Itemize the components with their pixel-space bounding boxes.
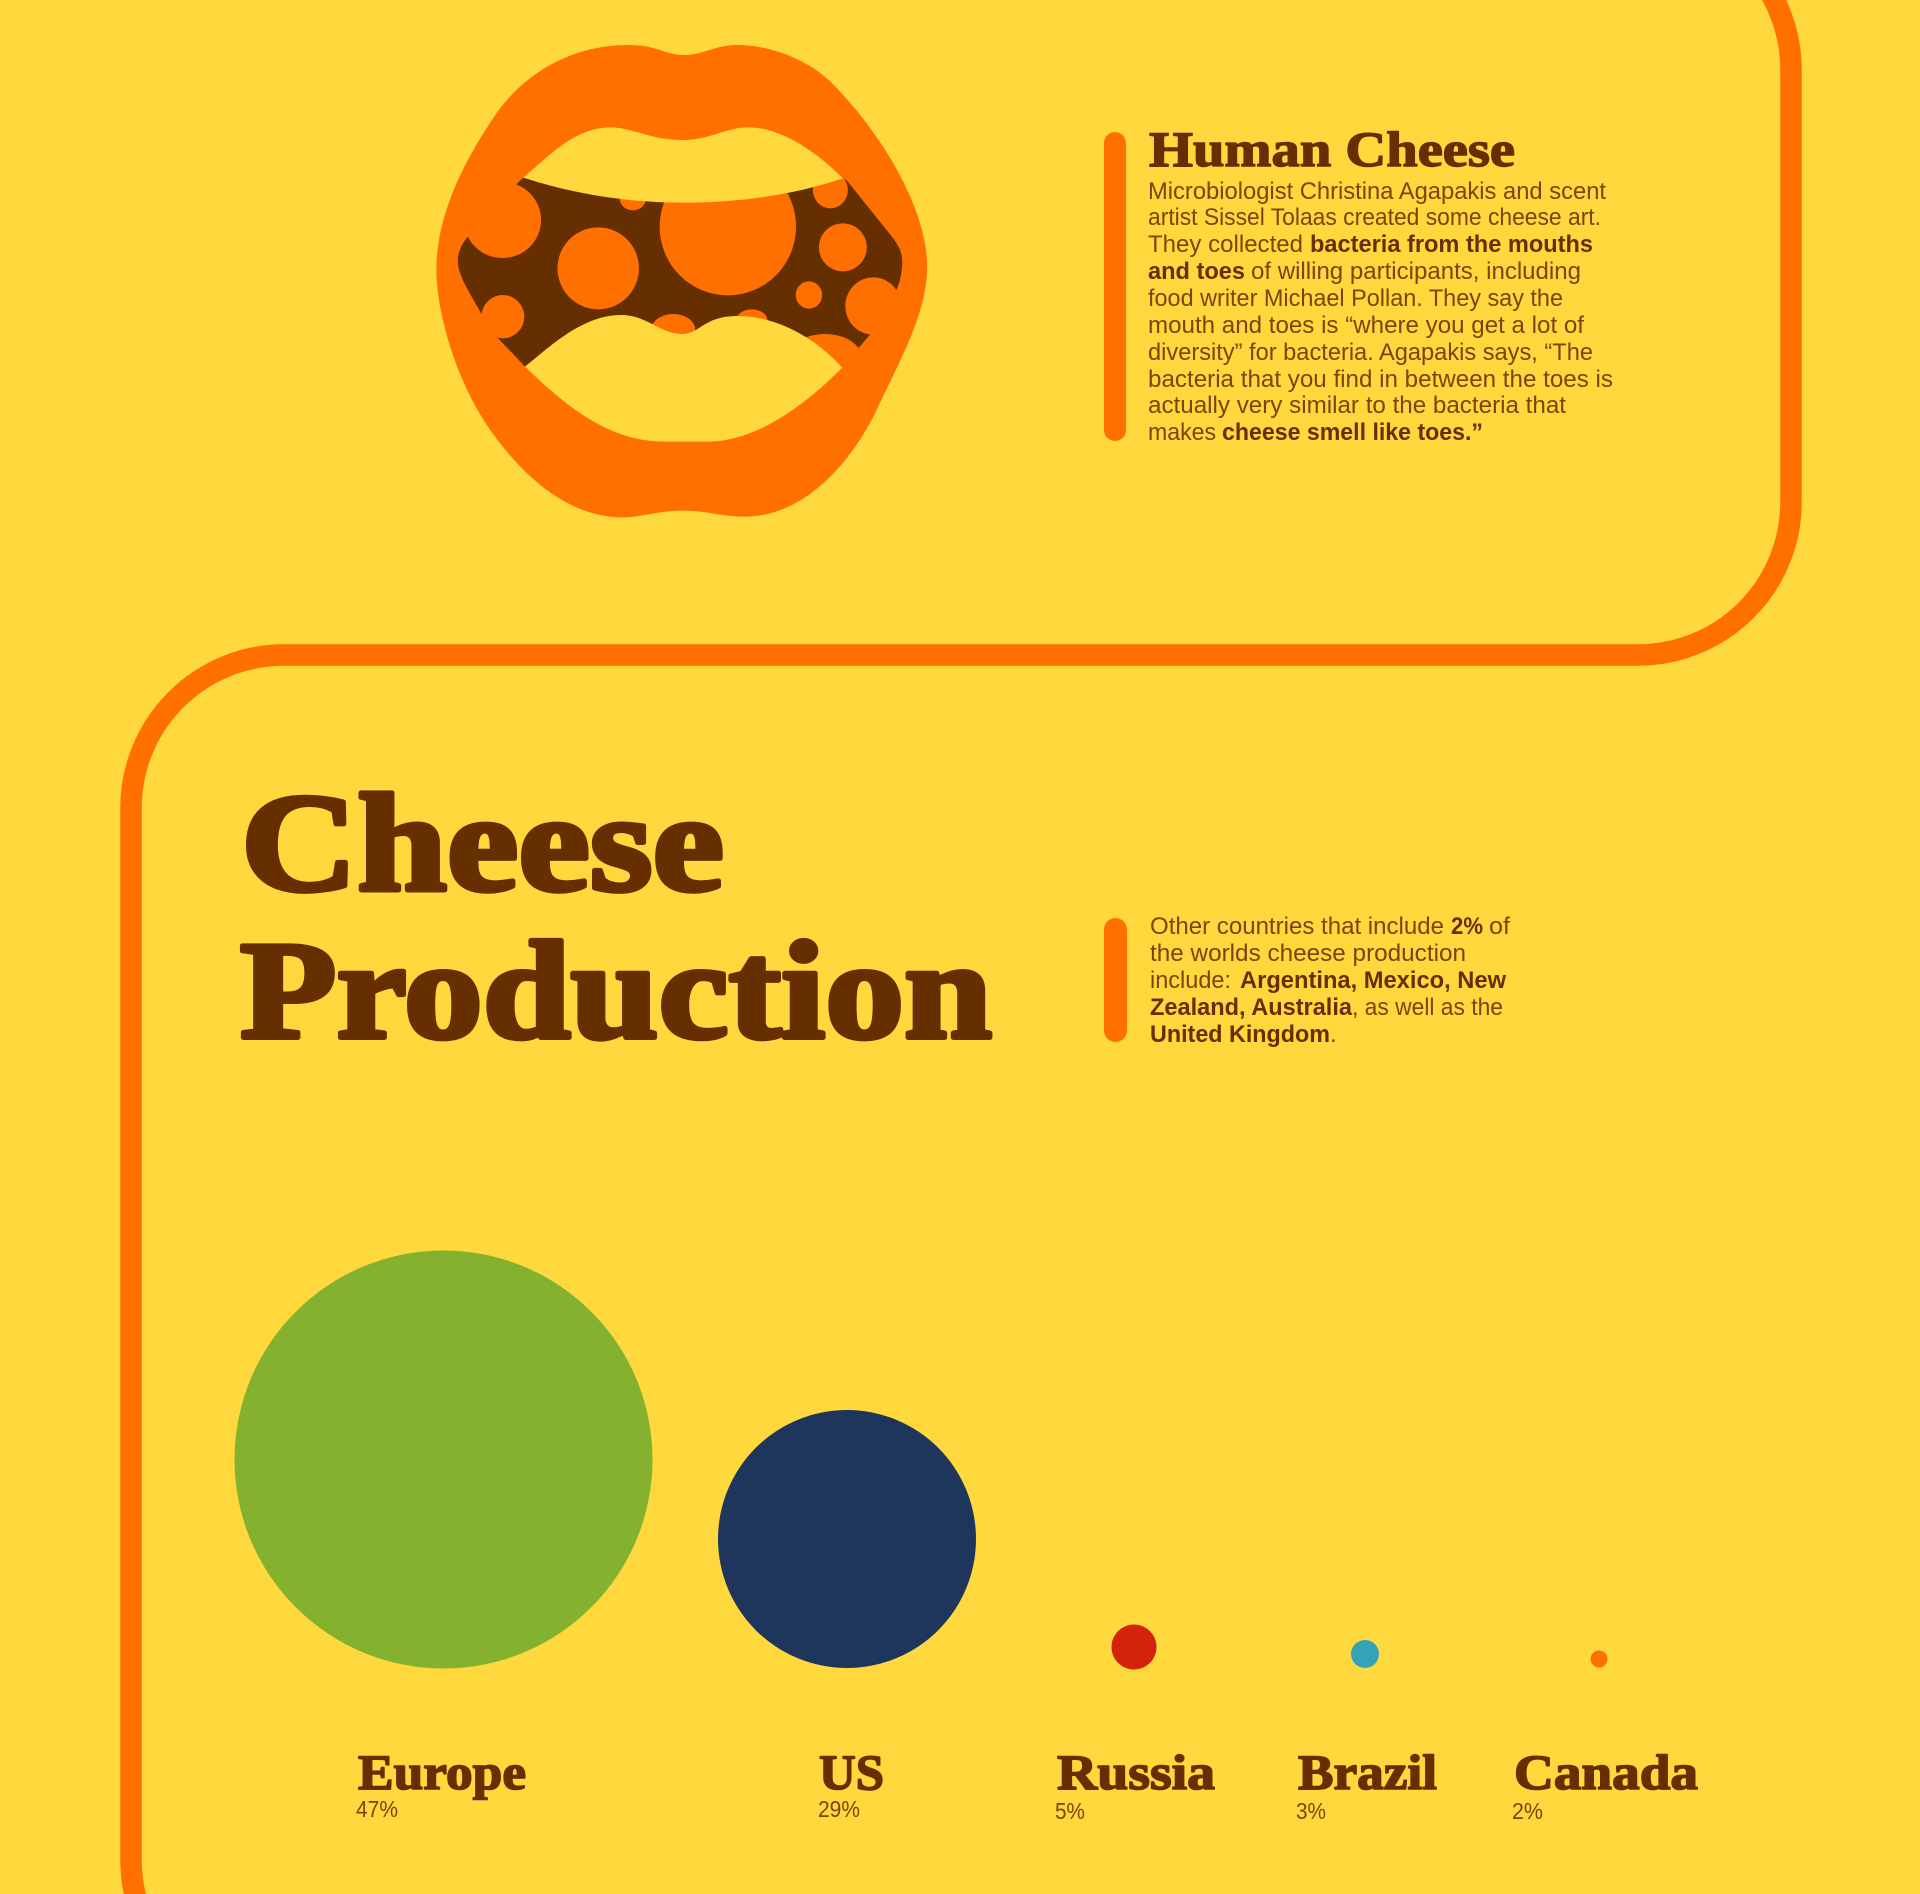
text block: human cheese description: mouth and toes is “where you get a lot of [1148,312,1584,339]
text block: other countries note: the worlds cheese production [1150,940,1466,967]
outer lips [436,45,927,517]
text block: other countries note: United Kingdom [1150,1021,1330,1048]
bubble: US [718,1410,976,1668]
label: Brazil 3%: Brazil [1298,1744,1437,1800]
text block: human cheese description: They collected [1148,231,1303,258]
label: Russia 5%: 5% [1055,1798,1085,1824]
label: Canada 2%: Canada [1514,1744,1698,1800]
text block: other countries note: include: [1150,967,1231,994]
title: Cheese Production: Cheese [241,766,724,921]
label: Europe 47%: 47% [356,1796,398,1822]
bubble: Russia [1112,1624,1156,1670]
heading: Human Cheese: Human Cheese [1149,121,1515,177]
cheese interior [458,178,902,387]
text block: human cheese description [1148,178,1613,446]
text block: other countries note: Other countries that include [1150,913,1444,940]
text block: human cheese description: actually very similar to the bacteria that [1148,392,1566,419]
bubble: Brazil [1351,1640,1379,1668]
accent bar: human cheese [1104,132,1126,441]
text block: human cheese description: food writer Michael Pollan. They say the [1148,285,1563,312]
text block: human cheese description: bacteria that you find in between the toes is [1148,366,1613,393]
text block: other countries note: Argentina, Mexico, New [1240,967,1506,994]
icon: mouth with cheese holes [436,45,927,517]
bubble: Europe [234,1250,652,1668]
text block: human cheese description: artist Sissel Tolaas created some cheese art. [1148,204,1601,231]
label: US 29% [818,1744,884,1822]
label: Brazil 3% [1296,1744,1437,1824]
text block: human cheese description: diversity” for bacteria. Agapakis says, “The [1148,339,1593,366]
label: Europe 47%: Europe [358,1744,526,1800]
upper lip highlight [523,127,843,203]
label: Brazil 3%: 3% [1296,1798,1326,1824]
accent bar: production note [1104,918,1127,1042]
title: Cheese Production: Production [240,914,992,1068]
title: Cheese Production [240,766,992,1068]
text block: other countries note: 2% [1451,913,1483,940]
text block: human cheese description: and toes [1148,258,1245,285]
label: Canada 2% [1512,1744,1698,1824]
label: Europe 47% [356,1744,526,1822]
text block: human cheese description: cheese smell like toes.” [1222,419,1483,446]
text block: other countries note: , as well as the [1352,994,1503,1021]
text block: other countries note: of [1489,913,1510,940]
label: Russia 5% [1055,1744,1215,1824]
text block: human cheese description: bacteria from the mouths [1310,231,1593,258]
text block: human cheese description: Microbiologist Christina Agapakis and scent [1148,178,1606,205]
label: Russia 5%: Russia [1057,1744,1215,1800]
text block: human cheese description: makes [1148,419,1216,446]
text block: other countries note: Zealand, Australia [1150,994,1353,1021]
text block: other countries note: . [1330,1021,1337,1048]
label: US 29%: US [819,1744,884,1800]
text block: human cheese description: of willing participants, including [1251,258,1581,285]
lower lip highlight [525,315,842,442]
label: Canada 2%: 2% [1512,1798,1543,1824]
text block: other countries note [1150,913,1510,1048]
bubble: Canada [1590,1650,1608,1668]
label: US 29%: 29% [818,1796,860,1822]
cheese holes [464,158,901,381]
